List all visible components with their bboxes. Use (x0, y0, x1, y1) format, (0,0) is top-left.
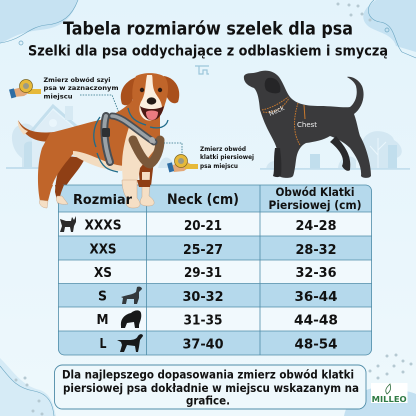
header row (58, 185, 372, 212)
icon: tape measure in hand, neck (9, 80, 41, 98)
size table: XS (94, 266, 112, 281)
far front leg (138, 160, 154, 186)
harness (104, 116, 160, 164)
subtitle: Szelki dla psa oddychające z odblaskiem i smyczą (28, 44, 388, 60)
head (132, 73, 168, 122)
icon: dog L (117, 334, 143, 352)
logo: Milleo (371, 383, 408, 404)
icon: dog M (121, 310, 141, 328)
tip callout box: piersiowej psa dokładnie w miejscu wskazanym na (63, 381, 359, 395)
header labels: Neck (cm) (167, 192, 239, 208)
neck values (182, 218, 224, 352)
torso (38, 100, 160, 201)
icon: chihuahua (60, 216, 76, 232)
size table (58, 185, 372, 355)
chest tape measure text: Zmierz obwód (200, 145, 246, 153)
chest values: 24-28 (296, 218, 336, 234)
belly (73, 151, 124, 171)
chest values (294, 218, 338, 352)
chest tape measure text: klatki piersiowej (200, 154, 254, 161)
background blob: top right (363, 0, 416, 58)
icon: tape measure in hand, chest (167, 154, 198, 172)
black dog silhouette with measurements: Chest (297, 121, 317, 129)
neck values: 20-21 (184, 218, 222, 234)
neck tape measure text: miejscu (44, 92, 73, 100)
background scene: trees right (260, 131, 410, 170)
logo: Milleo: MILLEO (372, 395, 407, 404)
ears (121, 77, 140, 105)
chest values: 44-48 (294, 312, 338, 328)
title: Tabela rozmiarów szelek dla psa (63, 20, 353, 40)
neck values: 37-40 (182, 336, 224, 352)
size table: XXS (90, 242, 116, 258)
tip callout box: Dla najlepszego dopasowania zmierz obwód klatki (62, 368, 354, 382)
tail (18, 120, 56, 142)
front and hind legs overlapping table (39, 180, 154, 208)
chest tape measure text (200, 145, 254, 170)
background blob: bottom right (344, 387, 416, 416)
size table: M (96, 313, 108, 328)
chest values: 32-36 (296, 265, 336, 281)
black dog silhouette with measurements: Neck (268, 104, 286, 118)
chest values: 36-44 (294, 289, 338, 305)
tip callout box: grafice. (186, 394, 230, 408)
black dog silhouette with measurements (244, 71, 371, 178)
background scene: house and trees left (6, 106, 176, 169)
neck values: 30-32 (182, 289, 224, 305)
small dog and house icon (195, 66, 209, 74)
neck tape measure text: Zmierz obwód szyi (44, 76, 110, 84)
neck values: 29-31 (184, 265, 222, 281)
size table: Piersiowej (cm) (268, 198, 362, 212)
arrow: neck pointer (80, 95, 119, 113)
icon: dog S (121, 287, 142, 304)
eyes and nose (140, 88, 144, 92)
chest and front leg (122, 124, 156, 198)
far hind leg (55, 156, 85, 204)
mouth (140, 106, 164, 120)
illustrated dog with harness (18, 73, 179, 204)
chest tape measure text: psa miejscu (200, 163, 238, 170)
far leg cream (142, 172, 150, 197)
arrow: chest pointer (164, 143, 182, 153)
size table: L (100, 337, 106, 352)
header label: Rozmiar: Rozmiar (73, 192, 132, 208)
chest values: 28-32 (296, 242, 336, 258)
row labels: sizes: XXXS (84, 218, 122, 234)
chest values: 48-54 (294, 336, 338, 352)
muzzle blaze (139, 75, 162, 120)
tip callout box (54, 365, 366, 409)
blue measuring arrows (94, 108, 168, 172)
neck values: 25-27 (183, 242, 223, 258)
neck tape measure text (44, 76, 119, 100)
background blob: bottom left (0, 358, 56, 416)
neck values: 31-35 (184, 312, 222, 328)
size table: Obwód Klatki (276, 185, 354, 199)
size table: S (98, 290, 107, 304)
neck tape measure text: psa w zaznaczonym (44, 84, 119, 92)
background blob: top left (0, 0, 78, 45)
